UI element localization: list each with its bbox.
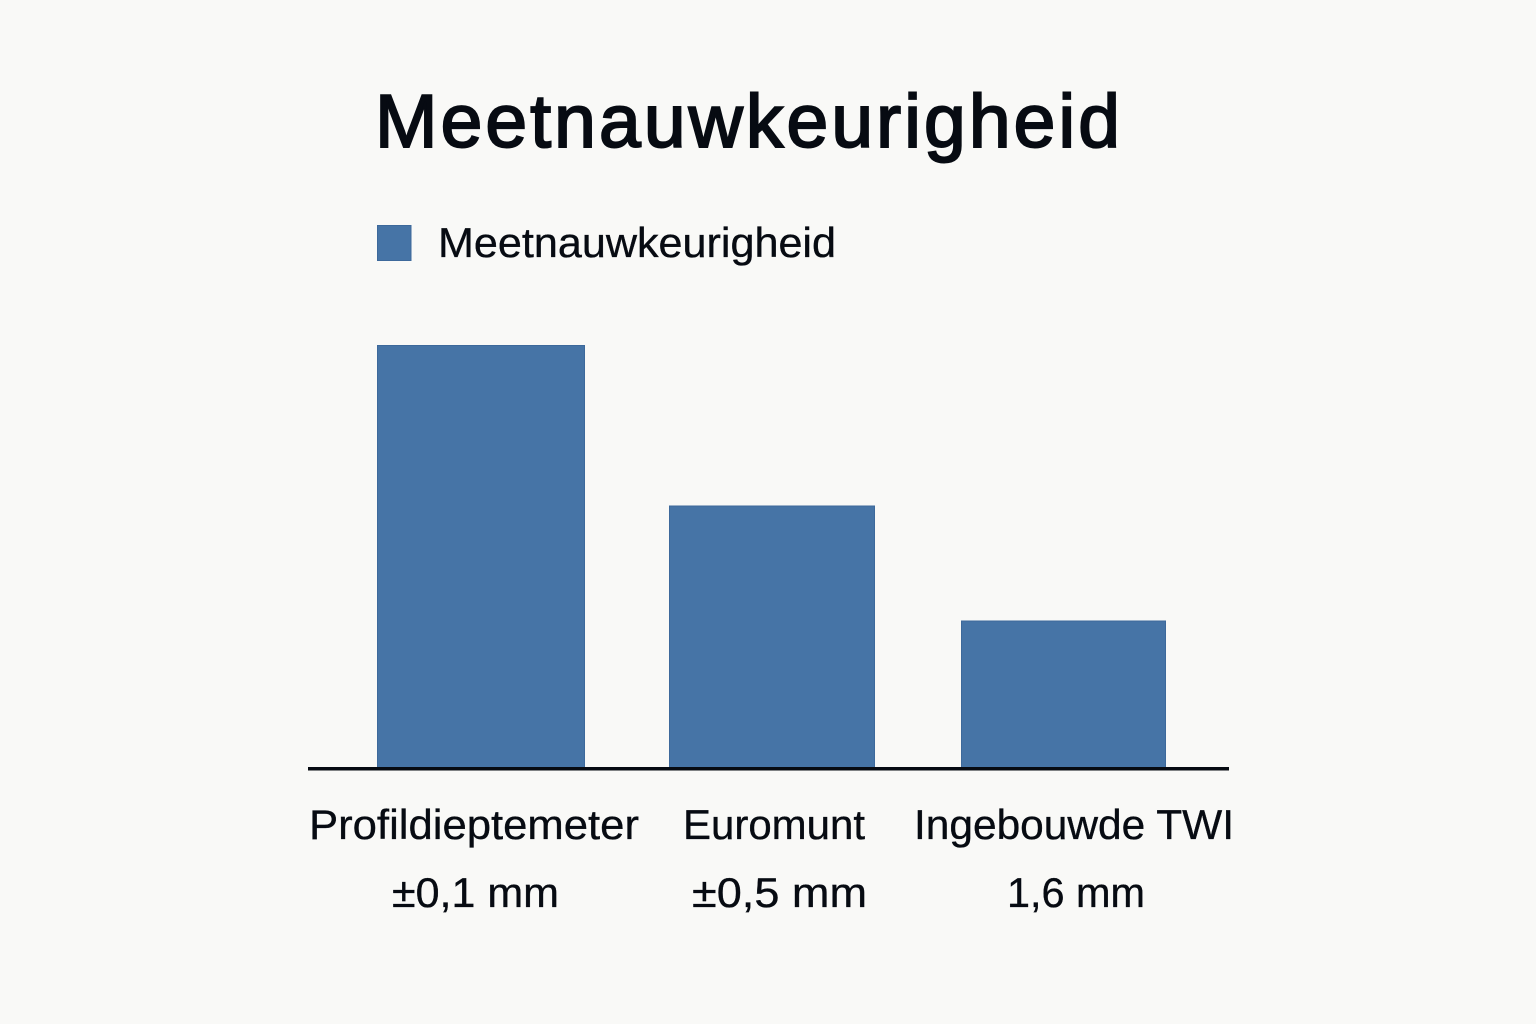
legend swatch xyxy=(378,226,411,260)
bar: Euromunt xyxy=(670,506,874,768)
category label: Profildieptemeter: ±0,1 mm xyxy=(392,869,559,916)
category label: Euromunt: ±0,5 mm xyxy=(692,869,867,916)
bar: Ingebouwde TWI xyxy=(962,621,1166,768)
category label: Euromunt xyxy=(683,801,867,916)
legend label: Meetnauwkeurigheid xyxy=(438,219,836,266)
category label: Euromunt: Euromunt xyxy=(683,801,865,848)
category label: Ingebouwde TWI xyxy=(914,801,1234,916)
bar: Profildieptemeter xyxy=(378,346,584,768)
title: Meetnauwkeurigheid xyxy=(375,79,1120,163)
bars xyxy=(378,346,1166,768)
category label: Ingebouwde TWI: Ingebouwde TWI xyxy=(914,801,1234,848)
category label: Profildieptemeter xyxy=(309,801,639,916)
x axis xyxy=(308,767,1229,770)
category label: Profildieptemeter: Profildieptemeter xyxy=(309,801,639,848)
category label: Ingebouwde TWI: 1,6 mm xyxy=(1007,869,1145,916)
legend xyxy=(378,219,836,266)
